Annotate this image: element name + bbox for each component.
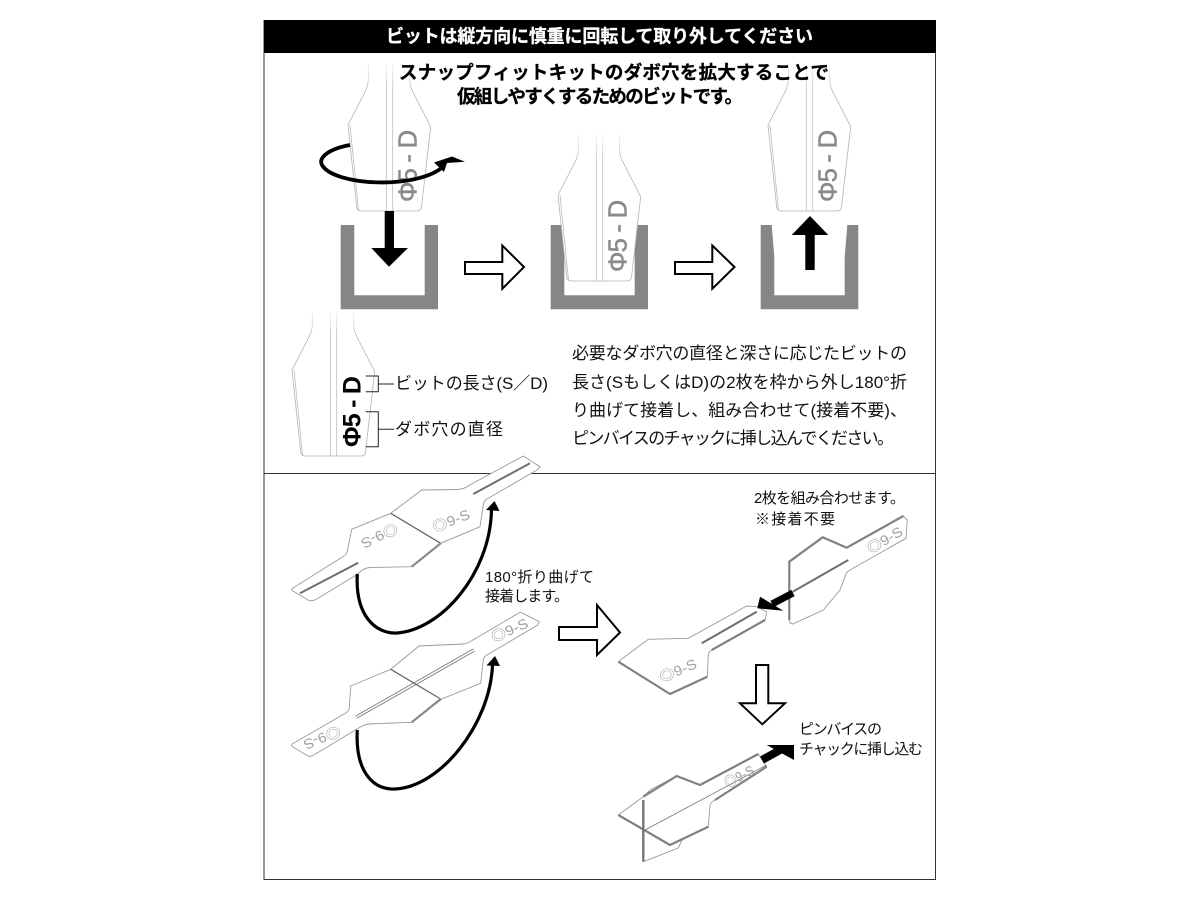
- pull-out arrow: [792, 216, 828, 270]
- rotation arrow: [321, 145, 465, 182]
- hollow arrow to assembly: [559, 605, 620, 655]
- title banner: [264, 20, 936, 53]
- bit piece upper: [789, 516, 907, 624]
- length bracket: [366, 376, 394, 392]
- assembled bit: [618, 754, 767, 862]
- fold label: [485, 569, 594, 605]
- etched label: ◎9-S: [864, 523, 906, 557]
- etched label: ◎9-S: [430, 506, 472, 535]
- bit marking: Φ5 - D: [338, 376, 366, 447]
- outer frame: [264, 20, 936, 880]
- unfolded bit B: [292, 612, 539, 756]
- drill bit step 1: Φ5 - D: [394, 130, 422, 202]
- label: bit length: ビットの長さ(S／D): [395, 374, 548, 393]
- fold arrow B: [357, 656, 500, 789]
- etched label: ◎9-S: [657, 655, 699, 685]
- assemble arrow: [757, 593, 793, 611]
- drill bit step 1: [348, 61, 431, 211]
- fold label: 180°折り曲げて: [485, 569, 594, 586]
- insert label: チャックに挿し込む: [799, 741, 923, 758]
- etched label: ◎9-S: [488, 615, 531, 645]
- assembly label: ※接着不要: [755, 511, 835, 528]
- etched label flipped: ◎9-S: [359, 520, 401, 552]
- insert label: [799, 721, 923, 758]
- push-in arrow: [371, 211, 408, 267]
- drill bit step 3: [768, 61, 851, 211]
- cup step 2: [551, 225, 648, 309]
- title banner: ビットは縦方向に慎重に回転して取り外してください: [386, 26, 813, 46]
- cup step 1: [341, 225, 438, 309]
- drill bit step 2: [558, 131, 641, 281]
- hollow arrow down: [740, 665, 785, 724]
- etched label flipped: ◎9-S: [301, 723, 343, 753]
- bit piece lower: [618, 606, 767, 694]
- etched label: ◎9-S: [721, 762, 757, 791]
- intro text: [399, 62, 829, 107]
- hollow arrow 2: [675, 246, 734, 289]
- label: hole diameter: ダボ穴の直径: [395, 420, 503, 439]
- fold arrow A: [357, 501, 500, 633]
- instructions paragraph: 長さ(SもしくはD)の2枚を枠から外し180°折: [572, 373, 907, 392]
- fold label: 接着します。: [485, 588, 569, 605]
- panel divider: [264, 472, 936, 474]
- instructions paragraph: [572, 344, 907, 448]
- assembly label: [754, 490, 905, 528]
- bit legend diagram: [292, 310, 375, 456]
- intro text: 仮組しやすくするためのビットです。: [457, 86, 743, 107]
- instructions paragraph: ピンバイスのチャックに挿し込んでください。: [572, 429, 894, 448]
- intro text: スナップフィットキットのダボ穴を拡大することで: [399, 62, 829, 83]
- assembly label: 2枚を組み合わせます。: [754, 490, 905, 507]
- hollow arrow 1: [465, 246, 524, 289]
- cup step 3: [761, 225, 858, 309]
- diameter bracket: [366, 412, 394, 447]
- drill bit step 2: Φ5 - D: [604, 200, 632, 272]
- unfolded bit A: [292, 456, 540, 601]
- drill bit step 3: Φ5 - D: [814, 130, 842, 202]
- instructions paragraph: 必要なダボ穴の直径と深さに応じたビットの: [572, 344, 907, 363]
- instructions paragraph: り曲げて接着し、組み合わせて(接着不要)、: [572, 401, 907, 420]
- insert label: ピンバイスの: [799, 721, 882, 738]
- insert arrow: [762, 745, 794, 760]
